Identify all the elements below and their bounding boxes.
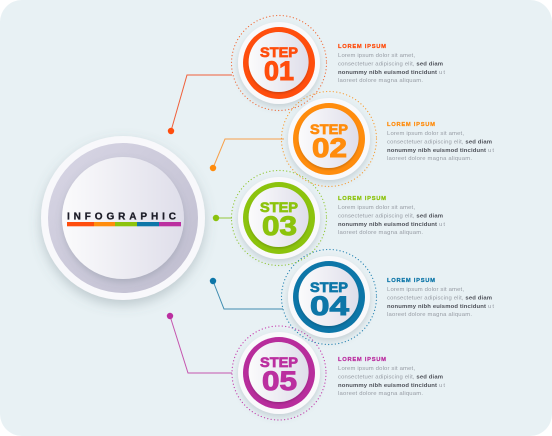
text block: step 5: ut xyxy=(439,383,445,389)
connector: step 2 xyxy=(210,139,284,171)
text block: step 5: consectetuer adipiscing elit, sed diam xyxy=(338,374,443,380)
text block: step 1: Lorem ipsum dolor sit amet, xyxy=(338,53,415,59)
text block: step 2: nonummy nibh euismod tincidunt xyxy=(387,148,486,154)
text block: step 2: ut xyxy=(488,148,494,154)
text block: step 3: nonummy nibh euismod tincidunt xyxy=(338,222,437,228)
connector: step 1 xyxy=(168,75,232,134)
text block: step 1: consectetuer adipiscing elit, sed diam xyxy=(338,62,443,68)
step 1 badge: STEP xyxy=(260,45,298,60)
text block: step 2: consectetuer adipiscing elit, sed diam xyxy=(387,140,492,146)
text block: step 4: consectetuer adipiscing elit, sed diam xyxy=(387,296,492,302)
text block: step 1: nonummy nibh euismod tincidunt xyxy=(338,70,437,76)
text block: step 4: nonummy nibh euismod tincidunt xyxy=(387,304,486,310)
text block: step 1: laoreet dolore magna aliquam. xyxy=(338,78,423,84)
text block: step 5 xyxy=(338,357,445,397)
text block: step 3: Lorem ipsum dolor sit amet, xyxy=(338,205,415,211)
text block: step 2: laoreet dolore magna aliquam. xyxy=(387,156,472,162)
step 4 badge: STEP xyxy=(310,280,348,295)
text block: step 5: laoreet dolore magna aliquam. xyxy=(338,391,423,397)
central badge xyxy=(41,136,205,300)
text block: step 3: consectetuer adipiscing elit, sed diam xyxy=(338,214,443,220)
text block: step 4: Lorem ipsum dolor sit amet, xyxy=(387,287,464,293)
step 2 badge: STEP xyxy=(310,122,348,137)
step 3 badge: STEP xyxy=(260,200,298,215)
text block: step 3 xyxy=(338,196,445,236)
step 3 badge xyxy=(232,170,326,266)
step 1 badge xyxy=(232,16,326,110)
text block: step 2: Lorem ipsum dolor sit amet, xyxy=(387,131,464,137)
title: INFOGRAPHIC xyxy=(67,212,176,222)
text block: step 1: ut xyxy=(439,70,445,76)
text block: step 5: LOREM IPSUM xyxy=(338,357,386,363)
text block: step 5: Lorem ipsum dolor sit amet, xyxy=(338,366,415,372)
step 5 badge: 05 xyxy=(262,366,297,396)
text block: step 3: ut xyxy=(439,222,445,228)
text block: step 4 xyxy=(387,278,494,318)
step 2 badge xyxy=(282,92,376,186)
connector: step 4 xyxy=(210,278,283,309)
text block: step 1: LOREM IPSUM xyxy=(338,44,386,50)
text block: step 3: laoreet dolore magna aliquam. xyxy=(338,230,423,236)
text block: step 2: LOREM IPSUM xyxy=(387,122,435,128)
step 1 badge: 01 xyxy=(264,56,294,86)
step 5 badge: STEP xyxy=(260,355,298,370)
text block: step 5: nonummy nibh euismod tincidunt xyxy=(338,383,437,389)
step 4 badge: 04 xyxy=(310,291,349,321)
text block: step 1 xyxy=(338,44,445,84)
step 2 badge: 02 xyxy=(312,133,347,163)
step 5 badge xyxy=(232,326,326,420)
connector: step 5 xyxy=(167,313,232,373)
text block: step 4: ut xyxy=(488,304,494,310)
text block: step 4: LOREM IPSUM xyxy=(387,278,435,284)
step 4 badge xyxy=(282,250,376,344)
text block: step 2 xyxy=(387,122,494,162)
text block: step 3: LOREM IPSUM xyxy=(338,196,386,202)
text block: step 4: laoreet dolore magna aliquam. xyxy=(387,312,472,318)
step 3 badge: 03 xyxy=(262,211,297,241)
colour bar xyxy=(67,222,181,226)
connector: step 3 xyxy=(213,215,232,221)
